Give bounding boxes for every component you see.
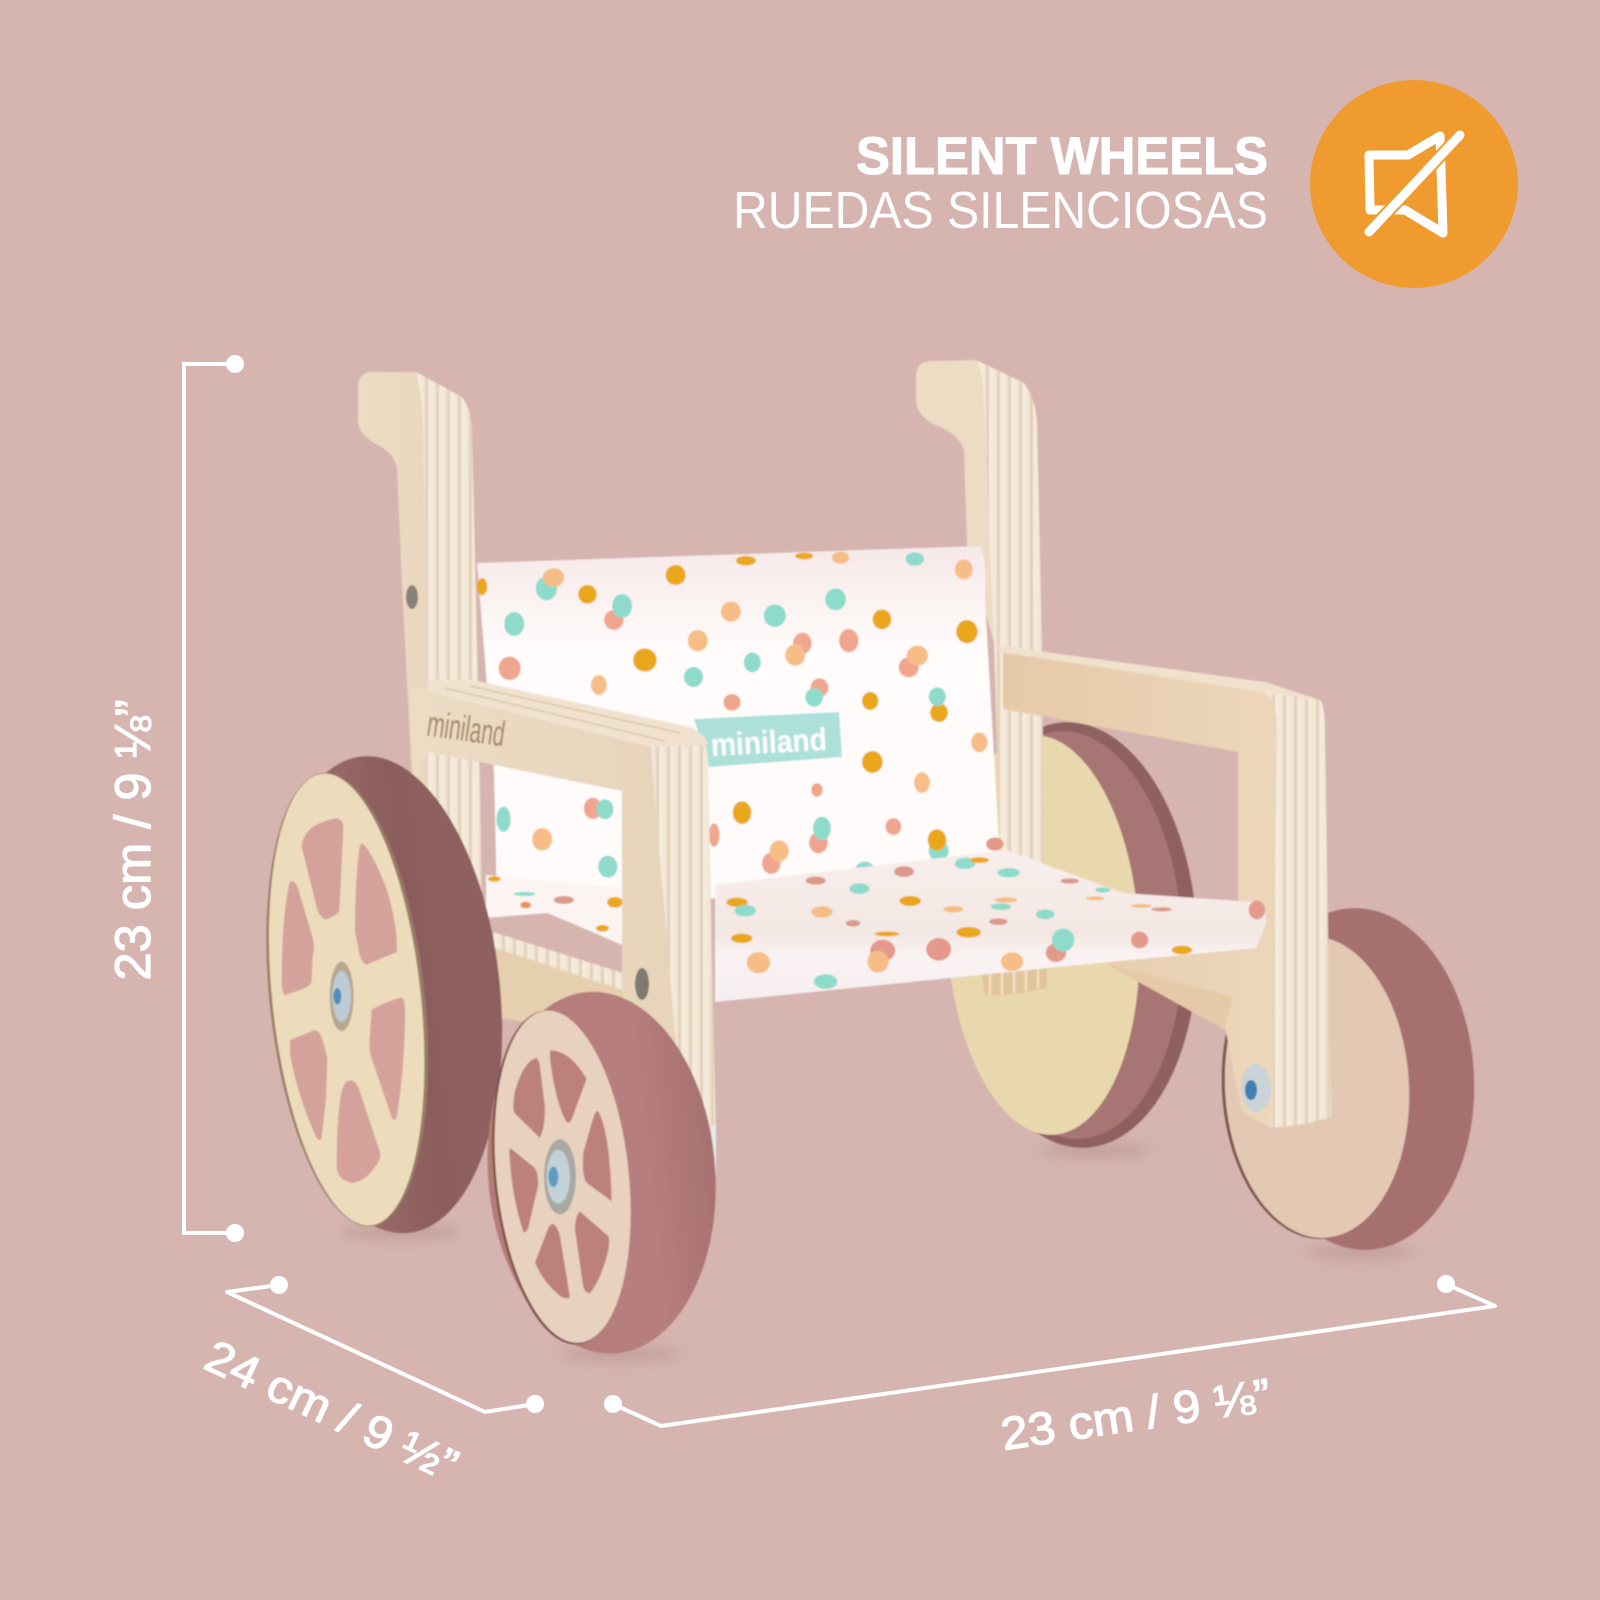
engraved logo: miniland <box>425 703 508 754</box>
height label: 23 cm / 9 ⅛” <box>105 700 161 980</box>
spoke windows <box>509 1050 612 1298</box>
fabric label <box>694 712 842 767</box>
fabric backrest <box>477 546 1000 905</box>
hub <box>330 962 354 1031</box>
fabric seat <box>488 837 1266 1002</box>
left wooden strut <box>493 932 640 1040</box>
right rear post <box>916 360 1047 995</box>
right armrest and front post <box>995 645 1331 1127</box>
left armrest and front post <box>410 679 716 1175</box>
wheel shadows <box>340 1144 1415 1360</box>
heading English: SILENT WHEELS <box>856 127 1268 186</box>
seat dots <box>488 857 989 989</box>
fabric sliver below post <box>711 1125 716 1175</box>
dimension: depth bracket <box>227 1276 544 1413</box>
wooden foot <box>978 950 1047 995</box>
far right wheel <box>1214 902 1483 1256</box>
left rear post <box>358 372 482 890</box>
screw <box>406 585 418 609</box>
strut <box>1100 955 1240 1030</box>
product photo: wooden toy wheelchair <box>244 360 1483 1372</box>
back wheel <box>937 716 1208 1154</box>
front small wheel <box>469 973 734 1372</box>
dimension: width bracket <box>604 1275 1495 1426</box>
front big wheel <box>244 737 526 1252</box>
dimension: height bracket <box>184 355 244 1242</box>
width label: 23 cm / 9 ⅛” <box>997 1368 1274 1460</box>
axle bolt <box>1241 1064 1271 1112</box>
feature heading: silent wheels <box>733 127 1268 240</box>
polka dots <box>477 552 988 878</box>
depth label: 24 cm / 9 ½” <box>198 1329 466 1492</box>
hub <box>544 1139 576 1214</box>
fabric label: miniland <box>710 721 828 763</box>
icon: muted speaker badge <box>1310 80 1518 288</box>
spoke windows <box>282 818 405 1183</box>
heading Spanish: RUEDAS SILENCIOSAS <box>733 182 1268 240</box>
left seat fragment seen through window <box>486 875 622 945</box>
screw <box>635 968 649 1000</box>
